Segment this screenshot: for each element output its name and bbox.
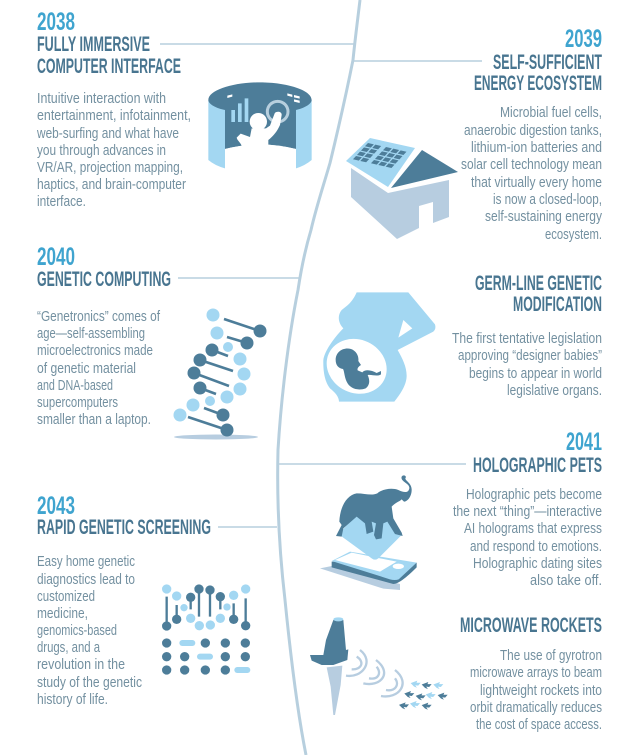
body text: diagnostics lead to — [37, 572, 135, 588]
body text: is now a closed-loop, — [493, 192, 602, 208]
body text: customized — [37, 589, 95, 605]
body text: approving “designer babies” — [458, 348, 602, 364]
icon: rocket with microwave beams and array — [310, 617, 448, 715]
body text: history of life. — [37, 692, 108, 708]
body text: drugs, and a — [37, 640, 101, 656]
body text: Holographic pets become — [466, 487, 602, 503]
body text: orbit dramatically reduces — [470, 700, 602, 716]
body text — [470, 648, 602, 733]
heading — [37, 33, 181, 78]
body text: solar cell technology mean — [461, 157, 602, 173]
body text: that virtually every home — [471, 175, 602, 191]
heading: COMPUTER INTERFACE — [37, 55, 181, 78]
icon: immersive cylinder display — [208, 82, 312, 172]
body text — [36, 91, 191, 210]
icon: pregnant silhouette with fetus — [318, 292, 435, 403]
body text — [461, 105, 603, 243]
year 2041: 2041 — [566, 428, 602, 456]
body text: microwave arrays to beam — [470, 665, 602, 681]
body text: lithium-ion batteries and — [471, 140, 602, 156]
body text: Intuitive interaction with — [37, 91, 166, 107]
year 2040: 2040 — [37, 243, 75, 271]
body text — [452, 331, 602, 399]
timeline spine with leader lines — [160, 0, 482, 755]
year 2039: 2039 — [565, 25, 602, 53]
panel: 2039 self-sufficient energy ecosystem — [346, 25, 603, 243]
body text — [37, 554, 142, 708]
body text: age—self-assembling — [37, 326, 145, 342]
body text: legislative organs. — [507, 383, 602, 399]
body text: supercomputers — [37, 395, 118, 411]
heading — [474, 51, 602, 95]
body text: haptics, and brain-computer — [37, 177, 186, 193]
body text: Holographic dating sites — [473, 556, 602, 572]
body text: you through advances in — [37, 143, 166, 159]
panel: 2041 holographic pets — [320, 428, 602, 590]
body text: anaerobic digestion tanks, — [464, 123, 602, 139]
body text: VR/AR, projection mapping, — [37, 160, 183, 176]
panel: 2040 genetic computing — [37, 243, 266, 440]
body text: and DNA-based — [37, 378, 113, 394]
heading: FULLY IMMERSIVE — [37, 33, 150, 56]
body text: and respond to emotions. — [470, 539, 602, 555]
icon: solar house — [346, 138, 458, 239]
heading: GENETIC COMPUTING — [37, 268, 171, 291]
body text: AI holograms that express — [464, 521, 602, 537]
body text — [453, 487, 602, 589]
panel: germ-line genetic modification — [318, 272, 602, 403]
body text: also take off. — [530, 573, 602, 589]
body text: web-surfing and what have — [36, 126, 179, 142]
body text: study of the genetic — [37, 675, 142, 691]
body text: smaller than a laptop. — [37, 412, 151, 428]
body text: The first tentative legislation — [452, 331, 602, 347]
body text: Easy home genetic — [37, 554, 135, 570]
icon: holographic elephant over phone — [320, 475, 417, 590]
body text: of genetic material — [37, 361, 136, 377]
body text: begins to appear in world — [469, 366, 602, 382]
body text: microelectronics made — [37, 343, 153, 359]
body text: interface. — [37, 194, 86, 210]
body text: The use of gyrotron — [500, 648, 602, 664]
body text: medicine, — [37, 606, 88, 622]
body text: self-sustaining energy — [485, 209, 603, 225]
body text: genomics-based — [37, 623, 117, 639]
icon: DNA helix — [174, 308, 266, 440]
body text: Microbial fuel cells, — [500, 105, 602, 121]
body text: entertainment, infotainment, — [37, 108, 191, 124]
body text: the cost of space access. — [476, 717, 602, 733]
body text: ecosystem. — [545, 227, 602, 243]
body text: revolution in the — [37, 657, 125, 673]
icon: genetic screening dots — [162, 584, 250, 675]
body text: the next “thing”—interactive — [453, 504, 602, 520]
heading: RAPID GENETIC SCREENING — [37, 516, 211, 539]
year 2043: 2043 — [37, 492, 75, 520]
year 2038: 2038 — [37, 8, 75, 36]
panel: 2038 fully immersive computer interface — [36, 8, 312, 210]
body text: lightweight rockets into — [480, 683, 602, 699]
body text: “Genetronics” comes of — [37, 309, 161, 325]
body text — [37, 309, 161, 428]
panel: 2043 rapid genetic screening — [37, 492, 250, 708]
panel: microwave rockets — [310, 614, 602, 733]
heading — [475, 272, 602, 316]
